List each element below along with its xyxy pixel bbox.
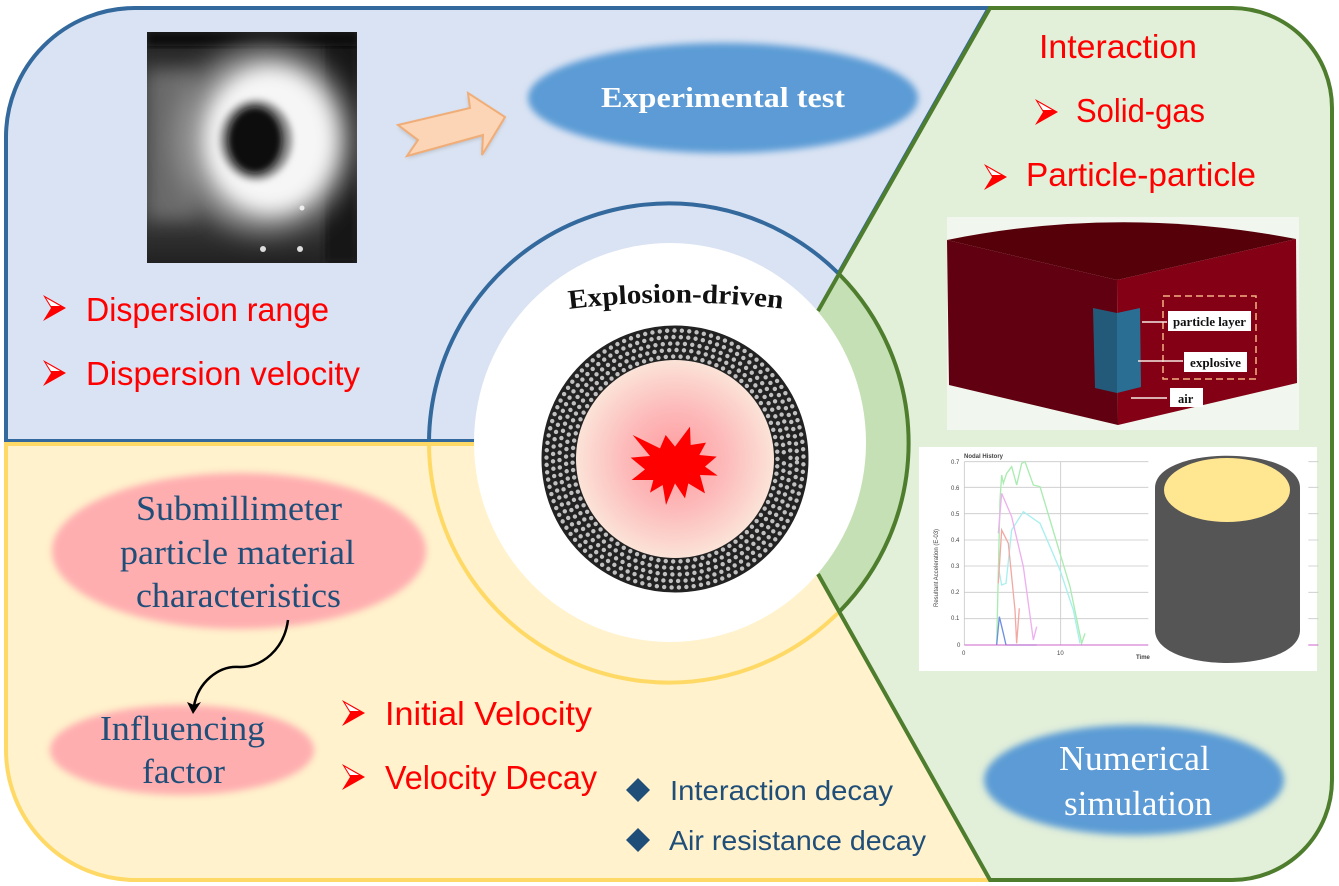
- label: particle layer: particle layer: [1173, 315, 1246, 329]
- label: explosive: [1184, 352, 1247, 372]
- ellipse: experimental test: [528, 43, 918, 153]
- chart: nodal history: 0.1: [951, 616, 960, 622]
- chart: nodal history: 0.4: [951, 538, 960, 544]
- ellipse: experimental test: Experimental test: [601, 82, 845, 114]
- chart: nodal history: 0.6: [951, 486, 960, 492]
- chart: nodal history: 0: [957, 643, 961, 649]
- heading: explosion-driven: Explosion-driven: [568, 284, 782, 312]
- figure: 3D simulation model: [947, 217, 1299, 430]
- label: air: [1170, 388, 1203, 407]
- chart: nodal history: 10: [1057, 651, 1064, 657]
- particle layer ring: [546, 330, 804, 588]
- list: interaction types: [984, 28, 1256, 193]
- ellipse: numerical simulation: [984, 725, 1284, 835]
- list: dispersion measures: [43, 291, 360, 392]
- arrow: curved connector: [187, 620, 288, 714]
- explosive core gradient: [576, 360, 774, 558]
- list: velocity factors: [342, 695, 597, 796]
- panel: material characteristics: [6, 444, 990, 880]
- list: dispersion measures: Dispersion velocity: [86, 355, 360, 392]
- list: interaction types: Particle-particle: [1026, 156, 1256, 193]
- ellipse: submillimeter particle material characteristics: Submillimeter: [136, 489, 342, 528]
- figure: nodal history chart and cylinder: [919, 447, 1318, 671]
- label: air: air: [1178, 392, 1194, 406]
- label: particle layer: [1168, 311, 1251, 331]
- ellipse: influencing factor: Influencing: [100, 709, 265, 748]
- chart: nodal history: 0.5: [951, 512, 960, 518]
- chart: nodal history: Nodal History: [964, 454, 1004, 460]
- list: decay types: [626, 775, 926, 856]
- ellipse: numerical simulation: simulation: [1064, 784, 1212, 823]
- chart: nodal history: Resultant Acceleration (E-03): [934, 529, 940, 607]
- ellipse: submillimeter particle material characteristics: characteristics: [136, 576, 341, 615]
- chart: nodal history: 0.3: [951, 564, 960, 570]
- list: decay types: Air resistance decay: [669, 825, 926, 856]
- ellipse: numerical simulation: Numerical: [1059, 739, 1210, 778]
- list: velocity factors: Velocity Decay: [385, 759, 597, 796]
- ellipse: influencing factor: [50, 705, 314, 795]
- chart: nodal history: 0.7: [951, 460, 960, 466]
- ellipse: submillimeter particle material characteristics: particle material: [120, 533, 355, 572]
- list: interaction types: Interaction: [1039, 28, 1197, 65]
- panel: numerical simulation: [818, 8, 1332, 880]
- ellipse: submillimeter particle material characteristics: [52, 473, 426, 629]
- list: decay types: Interaction decay: [670, 775, 893, 806]
- image: dispersion photograph: [147, 32, 357, 263]
- chart: nodal history: Time: [1136, 655, 1151, 661]
- arrow: to experimental test: [398, 93, 505, 158]
- chart: nodal history: [934, 454, 1318, 661]
- ellipse: influencing factor: factor: [142, 752, 225, 791]
- list: velocity factors: Initial Velocity: [385, 695, 593, 732]
- chart: nodal history: 0.2: [951, 590, 960, 596]
- panel: experimental test: [6, 8, 990, 441]
- center: explosion-driven diagram: [474, 243, 866, 642]
- icon: particle cylinder: [1155, 456, 1300, 663]
- chart: nodal history: 0: [962, 651, 966, 657]
- list: dispersion measures: Dispersion range: [86, 291, 329, 328]
- list: interaction types: Solid-gas: [1076, 92, 1205, 129]
- label: explosive: explosive: [1190, 356, 1241, 370]
- icon: explosion star: [631, 427, 718, 505]
